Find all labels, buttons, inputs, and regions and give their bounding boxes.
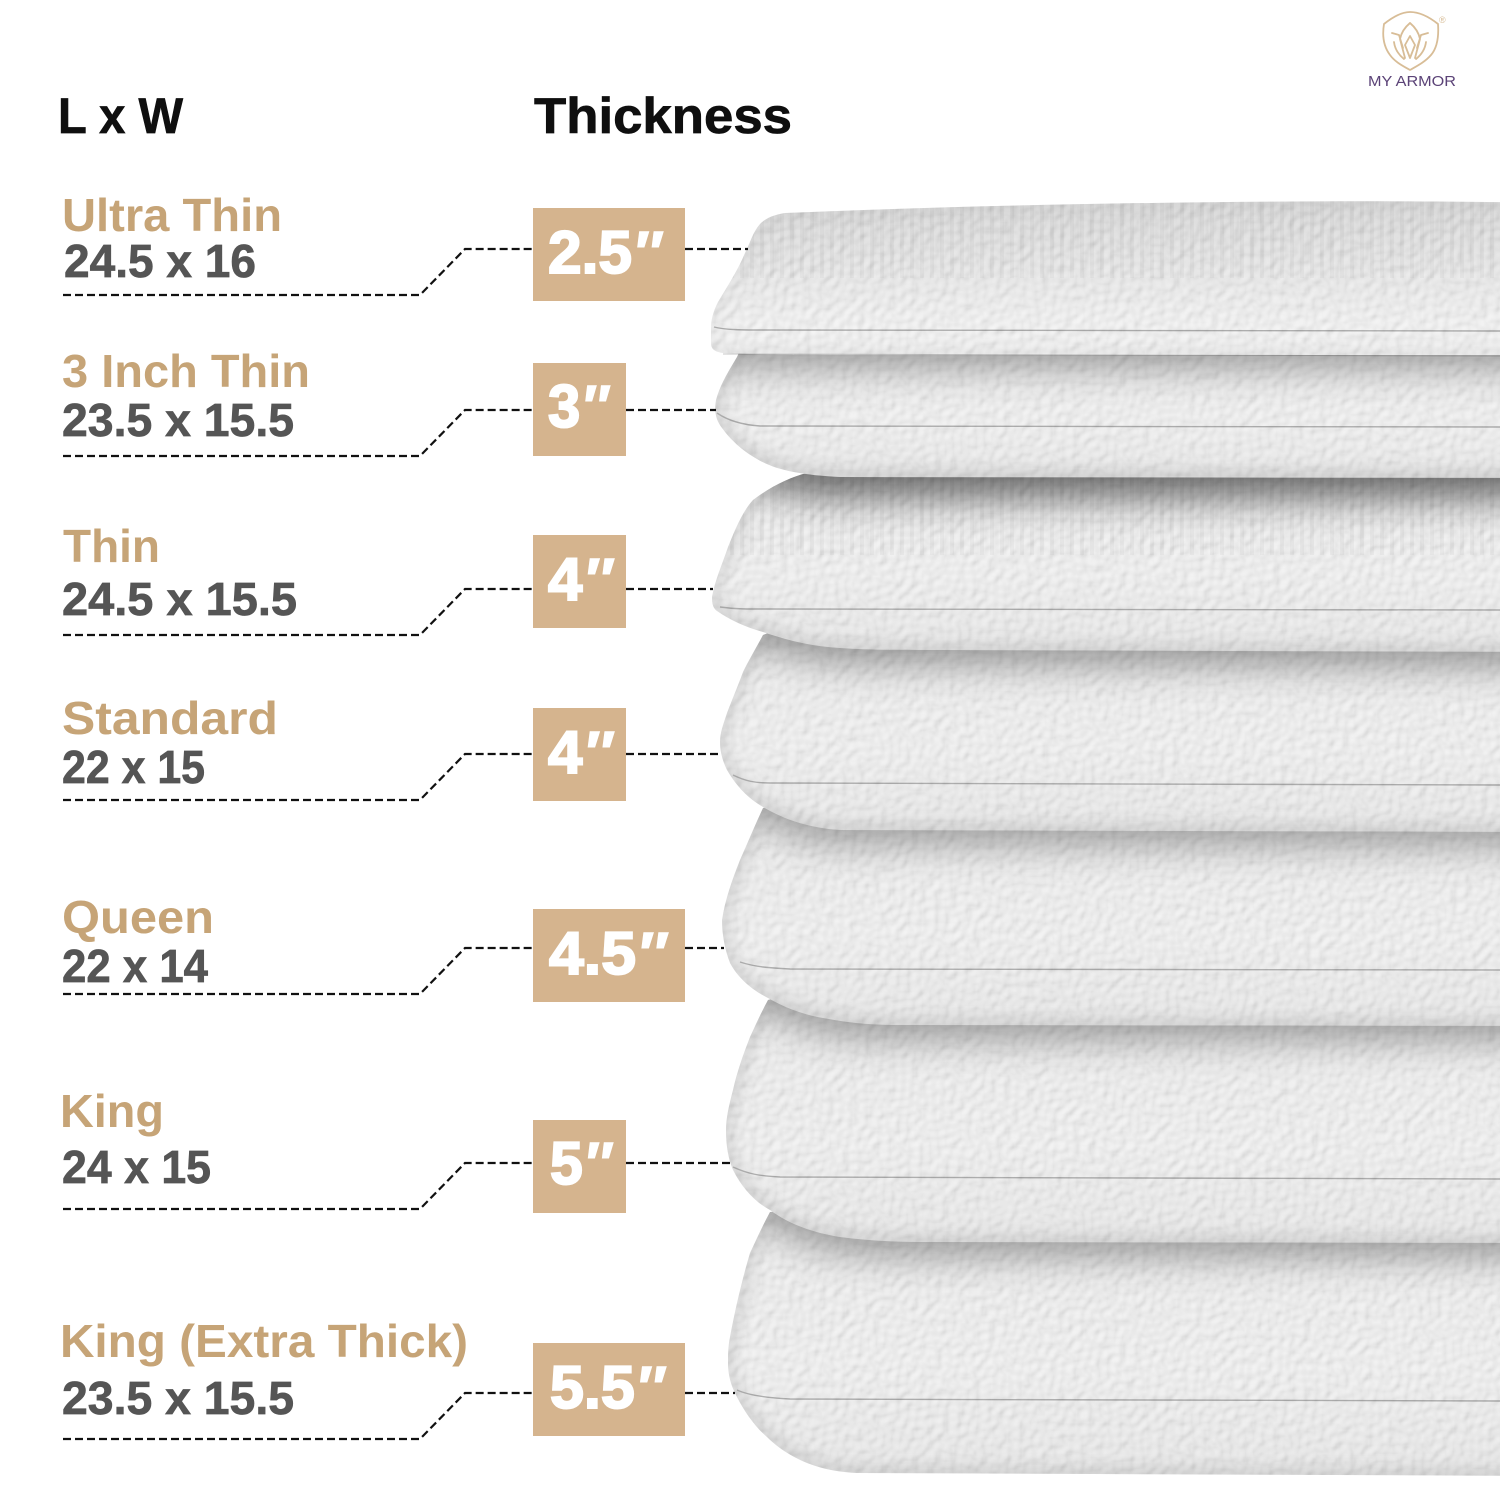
thickness badge (533, 909, 685, 1002)
thickness badge (533, 1343, 685, 1436)
leader line (63, 754, 721, 800)
size name: 3 Inch Thin (62, 345, 310, 397)
leader line (63, 948, 724, 994)
row: Thin (62, 520, 713, 635)
dimensions: 23.5 x 15.5 (62, 394, 294, 446)
pillow: 3 Inch Thin (715, 354, 1500, 478)
leader line (63, 1393, 735, 1439)
thickness badge (533, 363, 626, 456)
pillow: Standard (720, 634, 1500, 832)
size name: Standard (62, 692, 278, 744)
dimensions: 24.5 x 15.5 (62, 573, 297, 625)
size name: King (Extra Thick) (60, 1315, 468, 1367)
thickness badge: 4.5″ (549, 920, 668, 987)
row: King (60, 1085, 733, 1213)
thickness badge: 5.5″ (550, 1354, 666, 1421)
heading: L x W: L x W (58, 88, 184, 144)
thickness badge: 5″ (550, 1130, 613, 1197)
leader line (63, 410, 716, 456)
dimensions: 22 x 14 (62, 940, 208, 992)
pillow: King Extra Thick (728, 1212, 1500, 1476)
size name: Queen (62, 891, 214, 943)
thickness badge: 4″ (548, 719, 614, 786)
dimensions: 24 x 15 (62, 1141, 211, 1193)
pillow: Thin (712, 474, 1500, 652)
pillow: King (726, 999, 1500, 1243)
thickness badge: 2.5″ (548, 219, 663, 286)
logo: My Armor (1368, 12, 1456, 90)
registered mark: ® (1439, 15, 1446, 25)
row: 3 Inch Thin (62, 345, 716, 456)
row: Ultra Thin (62, 189, 748, 301)
pillow stack (700, 198, 1500, 1480)
thickness badge (533, 1120, 626, 1213)
leader line (63, 249, 748, 295)
thickness badge (533, 708, 626, 801)
logo wordmark: MY ARMOR (1368, 73, 1456, 90)
dimensions: 22 x 15 (62, 741, 205, 793)
icon: lotus shield (1383, 12, 1438, 70)
dimensions: 23.5 x 15.5 (62, 1372, 294, 1424)
pillow: Ultra Thin (700, 198, 1500, 358)
heading: Thickness: Thickness (534, 88, 792, 144)
pillow: Queen (722, 808, 1500, 1026)
leader line (63, 589, 713, 635)
leader line (63, 1163, 733, 1209)
thickness badge: 4″ (548, 546, 614, 613)
thickness badge: 3″ (548, 373, 610, 440)
size name: Thin (63, 520, 160, 572)
size name: Ultra Thin (62, 189, 282, 241)
thickness badge (533, 535, 626, 628)
dimensions: 24.5 x 16 (64, 235, 256, 287)
thickness badge (533, 208, 685, 301)
row: Standard (62, 692, 721, 801)
row: Queen (62, 891, 724, 1002)
row: King (Extra Thick) (60, 1315, 735, 1439)
size name: King (60, 1085, 164, 1137)
